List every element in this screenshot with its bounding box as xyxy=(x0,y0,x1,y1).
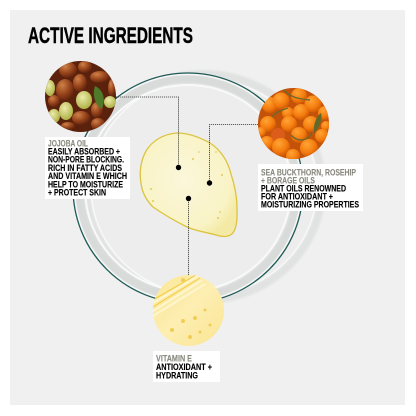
callout: vitamin E xyxy=(153,351,220,382)
title: ACTIVE INGREDIENTS xyxy=(28,23,193,48)
callout: vitamin E: ANTIOXIDANT + xyxy=(156,362,212,372)
callout: vitamin E: HYDRATING xyxy=(156,370,198,380)
photo: vitamin E gel xyxy=(153,275,224,346)
callout: sea buckthorn, rosehip + borage oils xyxy=(258,164,363,211)
callout: jojoba oil: NON-PORE BLOCKING. xyxy=(48,155,124,165)
callout: jojoba oil: + PROTECT SKIN xyxy=(48,188,106,198)
photo: sea buckthorn berries xyxy=(258,88,329,159)
callout: vitamin E: VITAMIN E xyxy=(156,354,192,364)
connector lines xyxy=(116,97,258,275)
oil droplet xyxy=(140,133,237,236)
callout: jojoba oil: JOJOBA OIL xyxy=(48,138,88,148)
callout: sea buckthorn, rosehip + borage oils: MOISTURIZING PROPERTIES xyxy=(261,200,359,210)
callout: jojoba oil: RICH IN FATTY ACIDS xyxy=(48,163,122,173)
connector dots xyxy=(176,165,212,201)
droplet speckles xyxy=(150,151,223,219)
callout: jojoba oil: EASILY ABSORBED + xyxy=(48,146,120,156)
petri dish xyxy=(73,73,322,303)
callout: sea buckthorn, rosehip + borage oils: + BORAGE OILS xyxy=(261,176,315,186)
callout: sea buckthorn, rosehip + borage oils: SEA BUCKTHORN, ROSEHIP xyxy=(261,168,356,178)
callout: sea buckthorn, rosehip + borage oils: PLANT OILS RENOWNED xyxy=(261,184,346,194)
callout: sea buckthorn, rosehip + borage oils: FOR ANTIOXIDANT + xyxy=(261,192,333,202)
callout: jojoba oil xyxy=(45,137,130,199)
photo: jojoba seeds xyxy=(45,61,116,132)
callout: jojoba oil: AND VITAMIN E WHICH xyxy=(48,171,127,181)
callout: jojoba oil: HELP TO MOISTURIZE xyxy=(48,179,123,189)
